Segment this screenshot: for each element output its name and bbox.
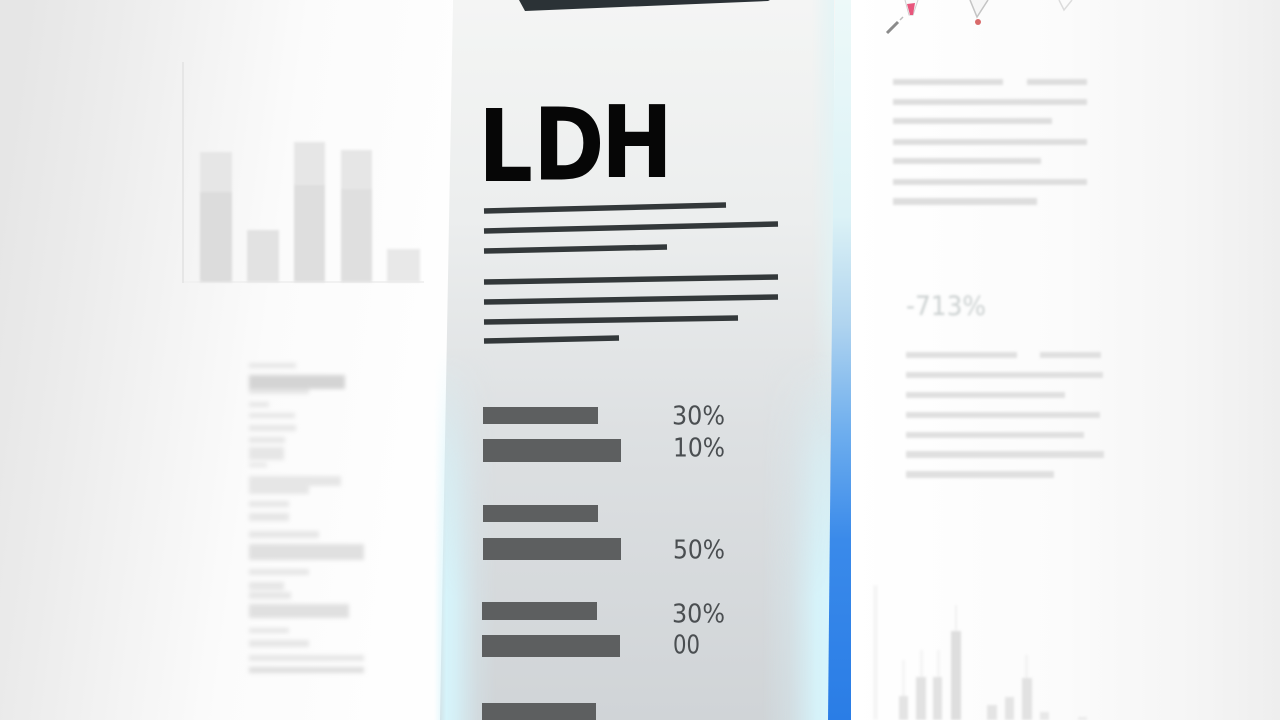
percent labels: 10% xyxy=(673,434,725,464)
panel right edge glow xyxy=(784,415,830,720)
bar group 4 xyxy=(482,703,596,720)
icon: outlined pin xyxy=(970,0,988,25)
icon: red pin xyxy=(905,0,918,15)
body text lines xyxy=(484,205,778,341)
percent labels: 50% xyxy=(673,536,725,566)
icon: pen xyxy=(887,17,903,33)
background left page xyxy=(0,0,452,720)
chart bars xyxy=(200,142,420,282)
chart baseline xyxy=(184,281,424,283)
blue side strip xyxy=(828,0,851,720)
top-right pin icons xyxy=(887,0,1072,33)
bar group 3 xyxy=(482,602,620,657)
centre panel with glow xyxy=(434,0,851,720)
panel left edge glow xyxy=(436,394,477,720)
icon: faint pin xyxy=(1059,0,1072,10)
background right page xyxy=(850,0,1280,720)
left blurred bar chart xyxy=(182,62,424,283)
right faded bar chart xyxy=(873,585,1087,720)
left blurred text column xyxy=(249,363,364,673)
panel upper right edge glow xyxy=(823,0,834,315)
bar group 1 xyxy=(483,407,621,462)
right upper text block xyxy=(893,79,1087,205)
panel: centre document xyxy=(440,0,835,720)
title: LDH xyxy=(478,84,673,205)
right lower text block xyxy=(906,352,1104,478)
horizontal bars and percentages xyxy=(482,402,725,720)
chart axis xyxy=(182,62,184,283)
bar group 2 xyxy=(483,505,621,560)
right faded percent: -713% xyxy=(906,291,986,322)
percent labels: 30% xyxy=(672,402,725,432)
percent labels: 30% xyxy=(672,600,725,630)
dark header tab xyxy=(519,0,770,11)
percent labels: 00 xyxy=(673,630,700,660)
percent labels xyxy=(672,402,725,660)
